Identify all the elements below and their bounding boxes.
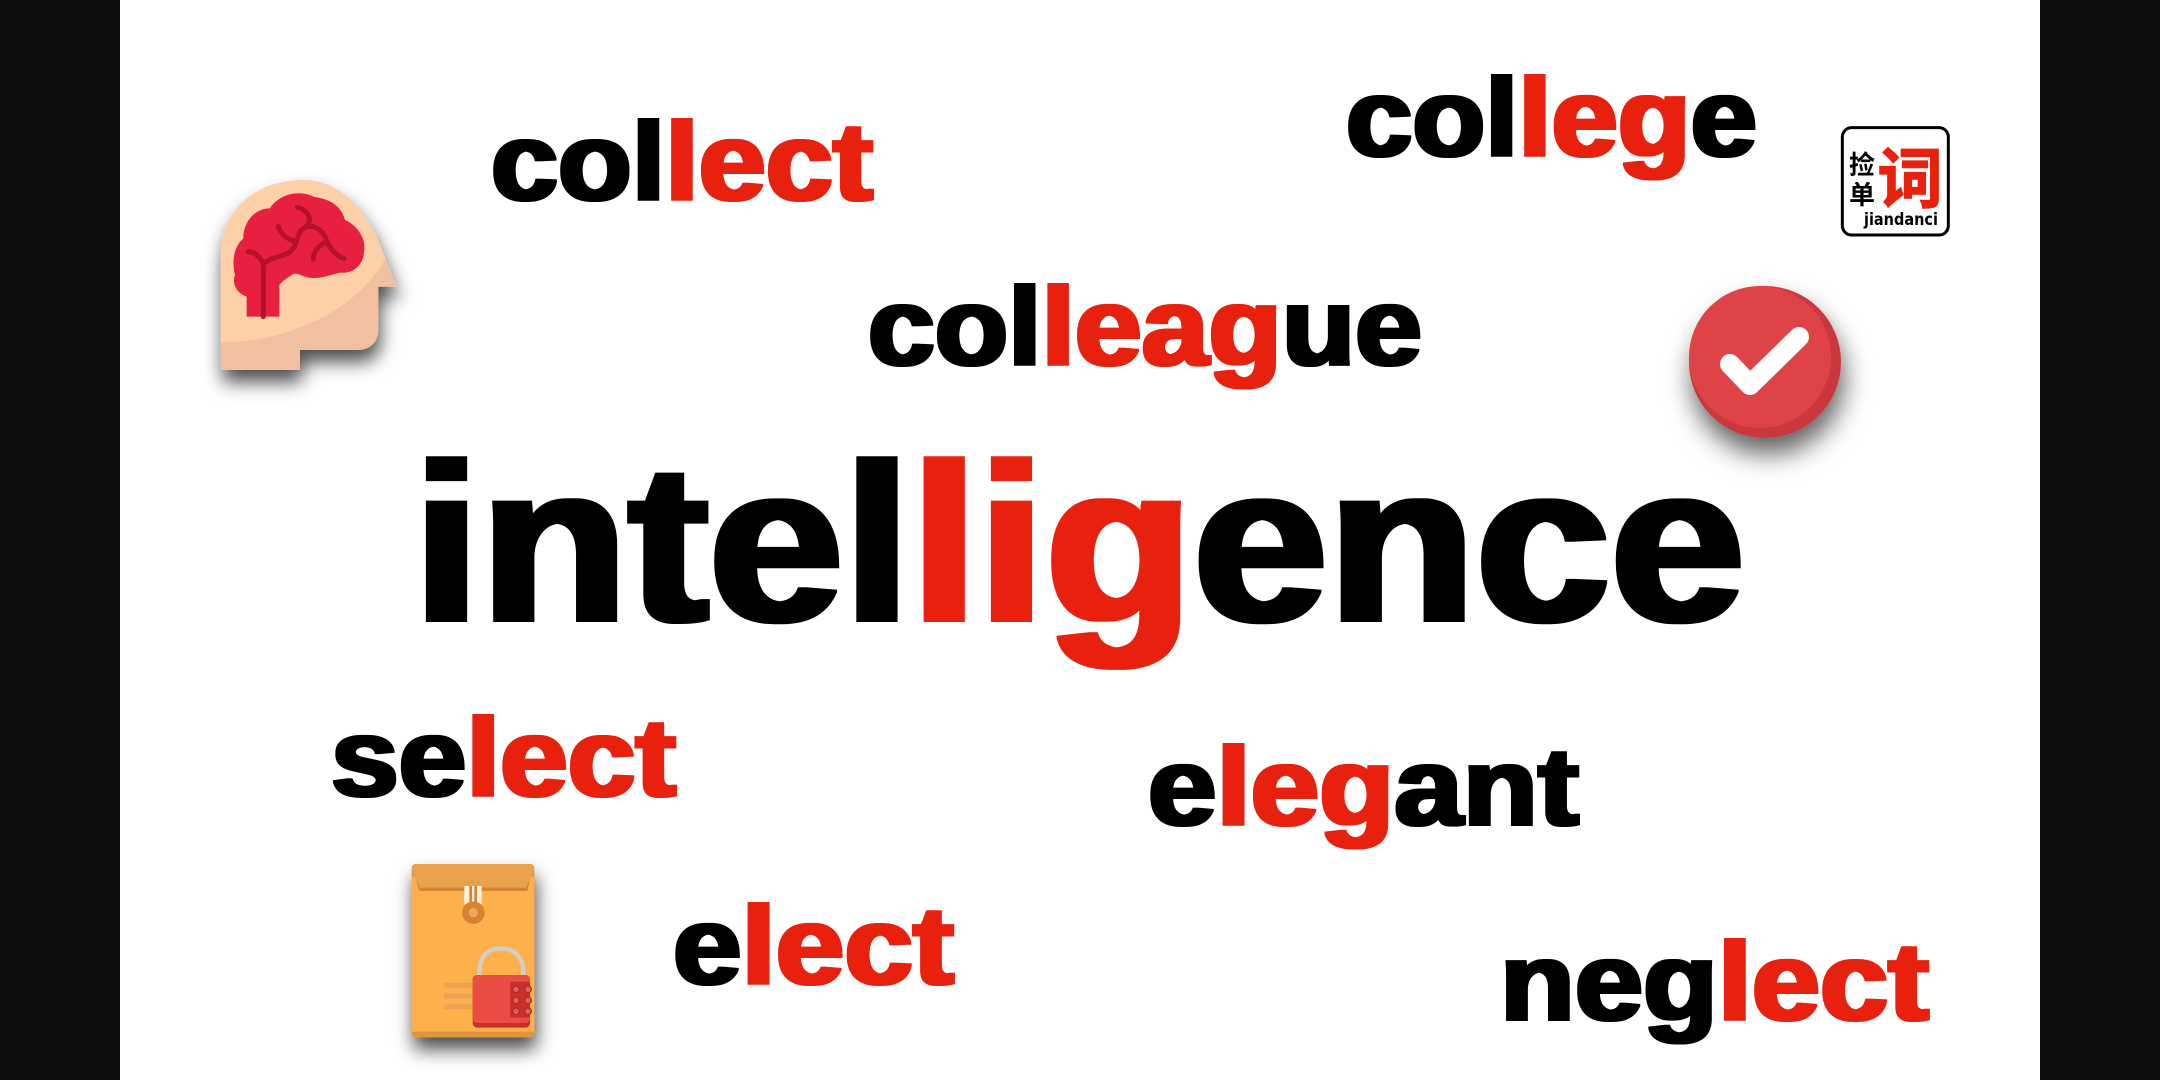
logo text: 词: 词 — [1877, 126, 1943, 221]
word: neglect: neglect — [1500, 920, 1929, 1044]
logo: jiandanci — [1842, 126, 1948, 235]
word: colleague: colleague — [868, 265, 1422, 389]
side bar: right — [2040, 0, 2160, 1080]
logo text: 单: 单 — [1849, 175, 1875, 212]
logo text: jiandanci: jiandanci — [1863, 210, 1938, 229]
icon: envelope with lock — [412, 864, 534, 1037]
word: college: college — [1346, 56, 1757, 180]
word: select: select — [331, 696, 676, 820]
word: elegant: elegant — [1148, 725, 1579, 849]
word: intelligence: intelligence — [413, 416, 1745, 669]
word: collect: collect — [491, 100, 873, 224]
logo text: 捡: 捡 — [1849, 145, 1875, 182]
icon: red check badge — [1689, 286, 1841, 438]
word: elect: elect — [673, 884, 954, 1008]
side bar: left — [0, 0, 120, 1080]
icon: head with brain — [213, 170, 397, 370]
